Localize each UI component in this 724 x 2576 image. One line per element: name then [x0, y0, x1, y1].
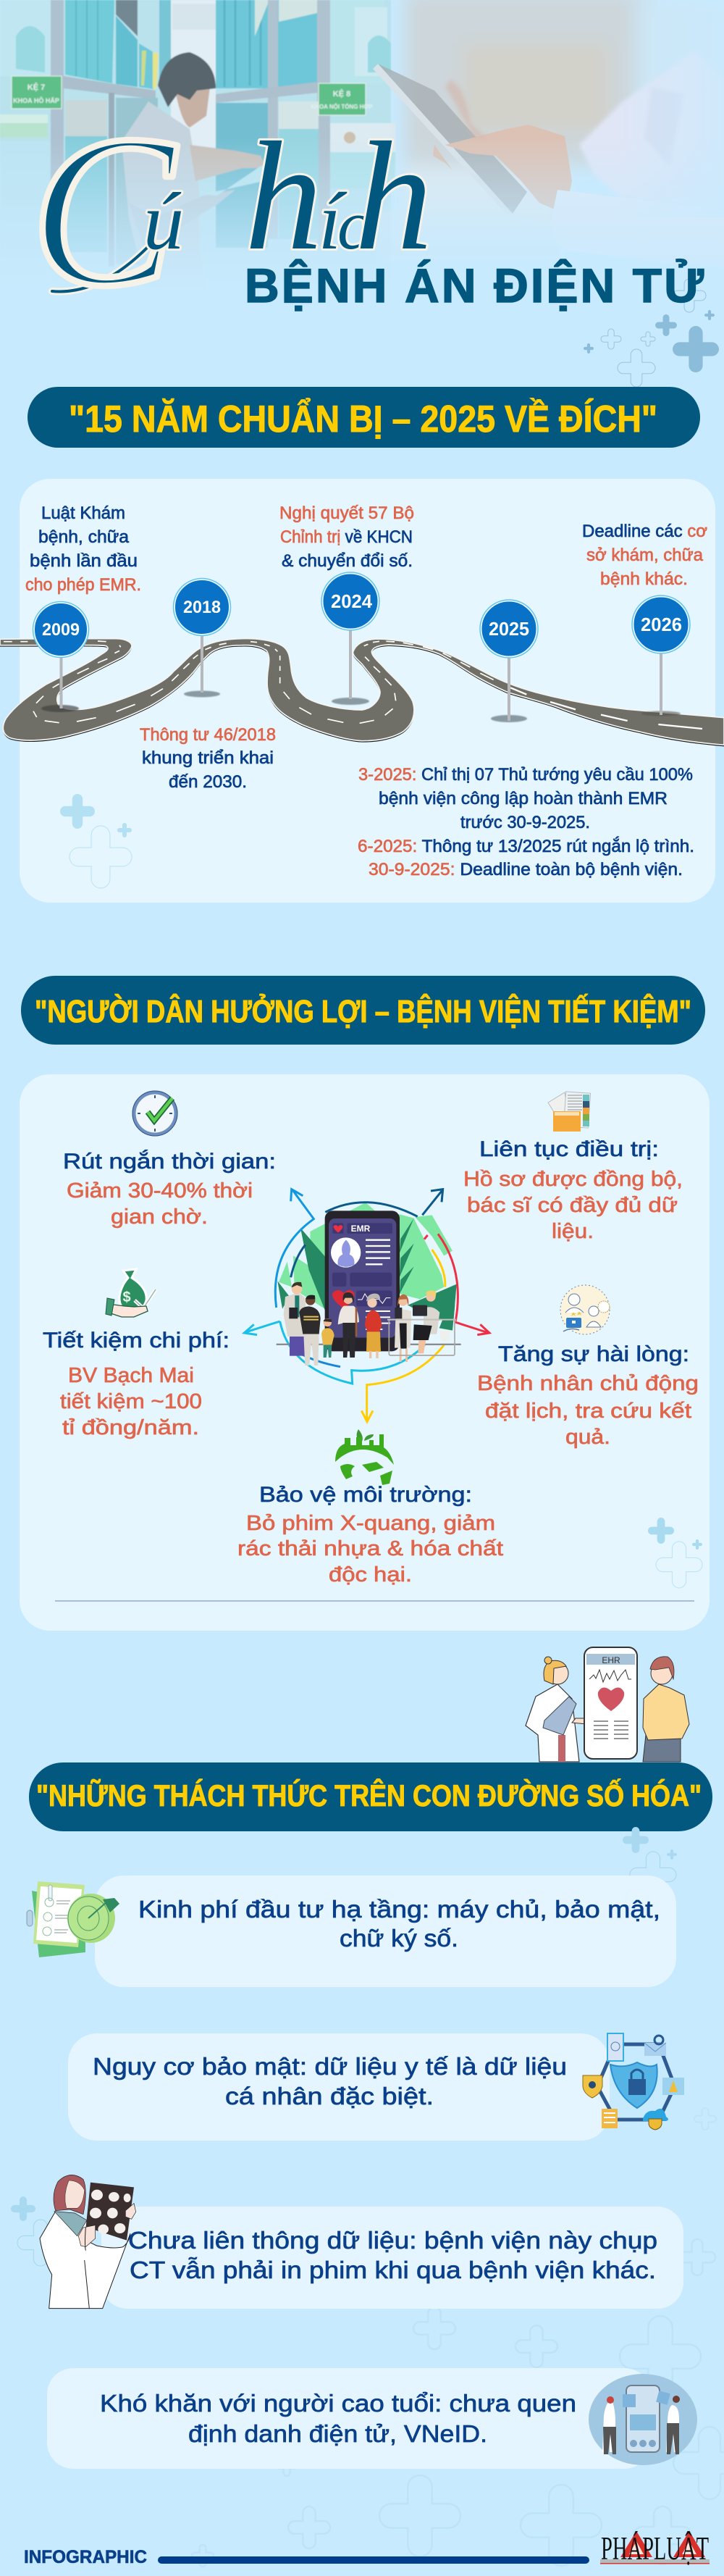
benefit: continuity of care [463, 1137, 683, 1243]
sign 2009 [33, 601, 88, 712]
sign 2024: 2024 [331, 590, 373, 612]
icon: clock with check [132, 1091, 177, 1136]
title: script line: h [355, 109, 433, 283]
green shelf sign KỆ 8 [311, 83, 373, 115]
icon: money bag over hand [106, 1269, 156, 1317]
text: data interoperability challenge [128, 2227, 657, 2283]
section heading 1 [28, 387, 700, 448]
card: elderly difficulty [47, 2368, 651, 2469]
section heading 3 [29, 1762, 712, 1831]
icon: checklist with target [27, 1881, 119, 1957]
footer [24, 2530, 710, 2567]
text: 2025 milestones: 6-2025: Thông tư 13/2025 rút ngắn lộ trình. [358, 837, 694, 856]
title: script line: h [245, 109, 323, 283]
hand pointing at tablet [433, 80, 572, 214]
text: 2009 milestone: bệnh, chữa [38, 527, 130, 547]
benefit: shorter time: Giảm 30-40% thời [67, 1179, 253, 1203]
text: 2018 milestone: đến 2030. [169, 772, 247, 792]
EHR phone: EHR [602, 1655, 620, 1665]
icon: satisfaction circle [560, 1285, 610, 1334]
benefit: satisfaction: Tăng sự hài lòng: [498, 1342, 689, 1366]
text: 2026 milestone: Deadline các cơ [582, 522, 707, 541]
panel plus decorations [648, 1518, 702, 1588]
text: 2026 milestone: bệnh khác. [600, 569, 688, 589]
text: 2024 milestone: & chuyển đổi số. [282, 551, 413, 571]
sign 2026: 2026 [641, 614, 682, 635]
title: script line: C [30, 91, 180, 331]
card: elderly difficulty: Khó khăn với người cao tuổi: chưa quen [100, 2390, 576, 2417]
benefit: satisfaction [477, 1342, 699, 1449]
blue arc and arrow [275, 1189, 313, 1308]
panel: timeline [0, 479, 724, 903]
benefit: shorter time: gian chờ. [111, 1205, 208, 1229]
text: 2009 milestone: Luật Khám [41, 503, 125, 523]
cyan arc and arrow [244, 1321, 425, 1384]
header photo: records room and doctor with tablet [0, 0, 724, 384]
icon: money bag over hand: $ [122, 1289, 131, 1305]
sign 2024 [321, 572, 379, 705]
icon: phone app circle [589, 2374, 697, 2465]
green shelf sign KỆ 7 [12, 76, 62, 109]
divider [55, 1600, 694, 1602]
doctor [526, 1657, 595, 1762]
benefit: satisfaction: quả. [565, 1426, 610, 1449]
red arc and arrow [424, 1234, 489, 1335]
green shelf sign KỆ 8: KỆ 8 [333, 89, 350, 99]
text: 2025 milestones: 3-2025: Chỉ thị 07 Thủ tướng yêu cầu 100% [358, 765, 693, 785]
illustration: doctor and patient with EHR phone [526, 1647, 689, 1762]
group of patients and doctors [284, 1282, 456, 1366]
green shelf sign KỆ 8: KHOA NỘI TỔNG HỢP [311, 104, 373, 110]
card: security risk: Nguy cơ bảo mật: dữ liệu y tế là dữ liệu [93, 2053, 567, 2080]
card: security risk [68, 2033, 610, 2141]
title: script line: í [319, 177, 348, 267]
navy arc and arrow [291, 1189, 443, 1277]
card: infrastructure cost: chữ ký số. [340, 1925, 458, 1952]
sign 2009: 2009 [42, 620, 80, 640]
green foliage [277, 1203, 457, 1321]
patient [643, 1657, 689, 1762]
footer: INFOGRAPHIC [24, 2547, 147, 2567]
benefit: continuity of care: Liên tục điều trị: [479, 1137, 659, 1161]
green shelf sign KỆ 7: KHOA HÔ HẤP [13, 96, 59, 104]
benefit: cost saving [43, 1329, 230, 1439]
sign 2026 [632, 595, 690, 716]
text: 2018 milestone [140, 725, 276, 792]
sign 2025 [480, 600, 538, 722]
card: elderly difficulty: định danh điện tử, VNeID. [188, 2420, 487, 2447]
EHR phone [584, 1647, 637, 1759]
benefit: satisfaction: đặt lịch, tra cứu kết [485, 1400, 691, 1423]
title: main line: BỆNH ÁN ĐIỆN TỬ [245, 259, 704, 312]
text: 2026 milestone [582, 522, 707, 589]
benefit: environment: rác thải nhựa & hóa chất [237, 1537, 503, 1560]
title: script line: c [337, 186, 369, 264]
benefit: shorter time [63, 1150, 276, 1229]
benefit: environment: Bảo vệ môi trường: [259, 1483, 472, 1507]
icon: security shield network [583, 2033, 684, 2130]
card: no data interoperability [101, 2207, 683, 2309]
benefit: cost saving: tỉ đồng/năm. [62, 1416, 199, 1439]
text: data interoperability challenge: CT vẫn phải in phim khi qua bệnh viện khác. [130, 2257, 656, 2283]
tablet [378, 64, 527, 214]
panel: benefits [20, 1074, 710, 1631]
title: script line: ú [143, 177, 184, 267]
text: 2009 milestone: bệnh lần đầu [30, 551, 138, 571]
section heading 2 [21, 976, 705, 1045]
section heading 1: "15 NĂM CHUẨN BỊ – 2025 VỀ ĐÍCH" [69, 398, 657, 440]
text: 2009 milestone: cho phép EMR. [25, 575, 141, 595]
phone with EMR record [325, 1210, 400, 1351]
benefit: satisfaction: Bệnh nhân chủ động [477, 1372, 699, 1395]
yellow arc and arrow [361, 1250, 445, 1422]
text: 2024 milestone: Chỉnh trị về KHCN [280, 527, 413, 547]
card: infrastructure cost [95, 1875, 676, 1987]
coat sleeve [550, 190, 724, 268]
benefit: continuity of care: Hồ sơ được đồng bộ, [463, 1168, 683, 1191]
green shelf sign KỆ 7: KỆ 7 [28, 83, 45, 92]
benefit: environment [237, 1483, 503, 1586]
phone with EMR record: EMR [351, 1224, 371, 1234]
text: 2018 milestone: Thông tư 46/2018 [140, 725, 276, 745]
text: 2024 milestone [279, 503, 414, 571]
text: 2018 milestone: khung triển khai [142, 748, 274, 768]
illustration: doctor reading CT film [40, 2175, 136, 2309]
faint background plus pattern [11, 1827, 724, 2567]
benefit: cost saving: tiết kiệm ~100 [60, 1390, 202, 1413]
base line [277, 1344, 461, 1345]
text: 2025 milestones: trước 30-9-2025. [460, 813, 590, 832]
text: 2025 milestones: bệnh viện công lập hoàn thành EMR [379, 789, 668, 808]
text: data interoperability challenge: Chưa liên thông dữ liệu: bệnh viện này chụp [128, 2227, 657, 2254]
text: 2024 milestone: Nghị quyết 57 Bộ [279, 503, 414, 523]
title: script line [30, 91, 433, 331]
card: infrastructure cost: Kinh phí đầu tư hạ tầng: máy chủ, bảo mật, [138, 1896, 660, 1923]
blurred doctor background [405, 0, 724, 232]
benefit: environment: Bỏ phim X-quang, giảm [246, 1512, 495, 1535]
winding road [0, 639, 724, 746]
benefit: cost saving: Tiết kiệm chi phí: [43, 1329, 230, 1352]
panel plus decorations [60, 794, 132, 888]
benefit: shorter time: Rút ngắn thời gian: [63, 1150, 276, 1174]
card: security risk: cá nhân đặc biệt. [225, 2083, 434, 2109]
benefit: environment: độc hại. [329, 1563, 412, 1586]
sign 2018 [174, 578, 230, 697]
text: 2025 milestones: 30-9-2025: Deadline toàn bộ bệnh viện. [369, 860, 683, 879]
benefit: continuity of care: bác sĩ có đầy đủ dữ [467, 1194, 678, 1217]
man reading a record [122, 52, 269, 290]
header plus decorations [584, 279, 719, 387]
sign 2025: 2025 [489, 618, 529, 640]
text: 2026 milestone: sở khám, chữa [586, 545, 704, 565]
text: 2025 milestones [358, 765, 694, 879]
text: 2009 milestone [25, 503, 141, 595]
benefit: cost saving: BV Bạch Mai [68, 1364, 194, 1387]
central EMR illustration [244, 1189, 489, 1422]
icon: document folder [548, 1092, 591, 1132]
sign 2018: 2018 [183, 598, 221, 617]
icon: green earth with city [335, 1429, 394, 1485]
benefit: continuity of care: liệu. [552, 1220, 594, 1243]
